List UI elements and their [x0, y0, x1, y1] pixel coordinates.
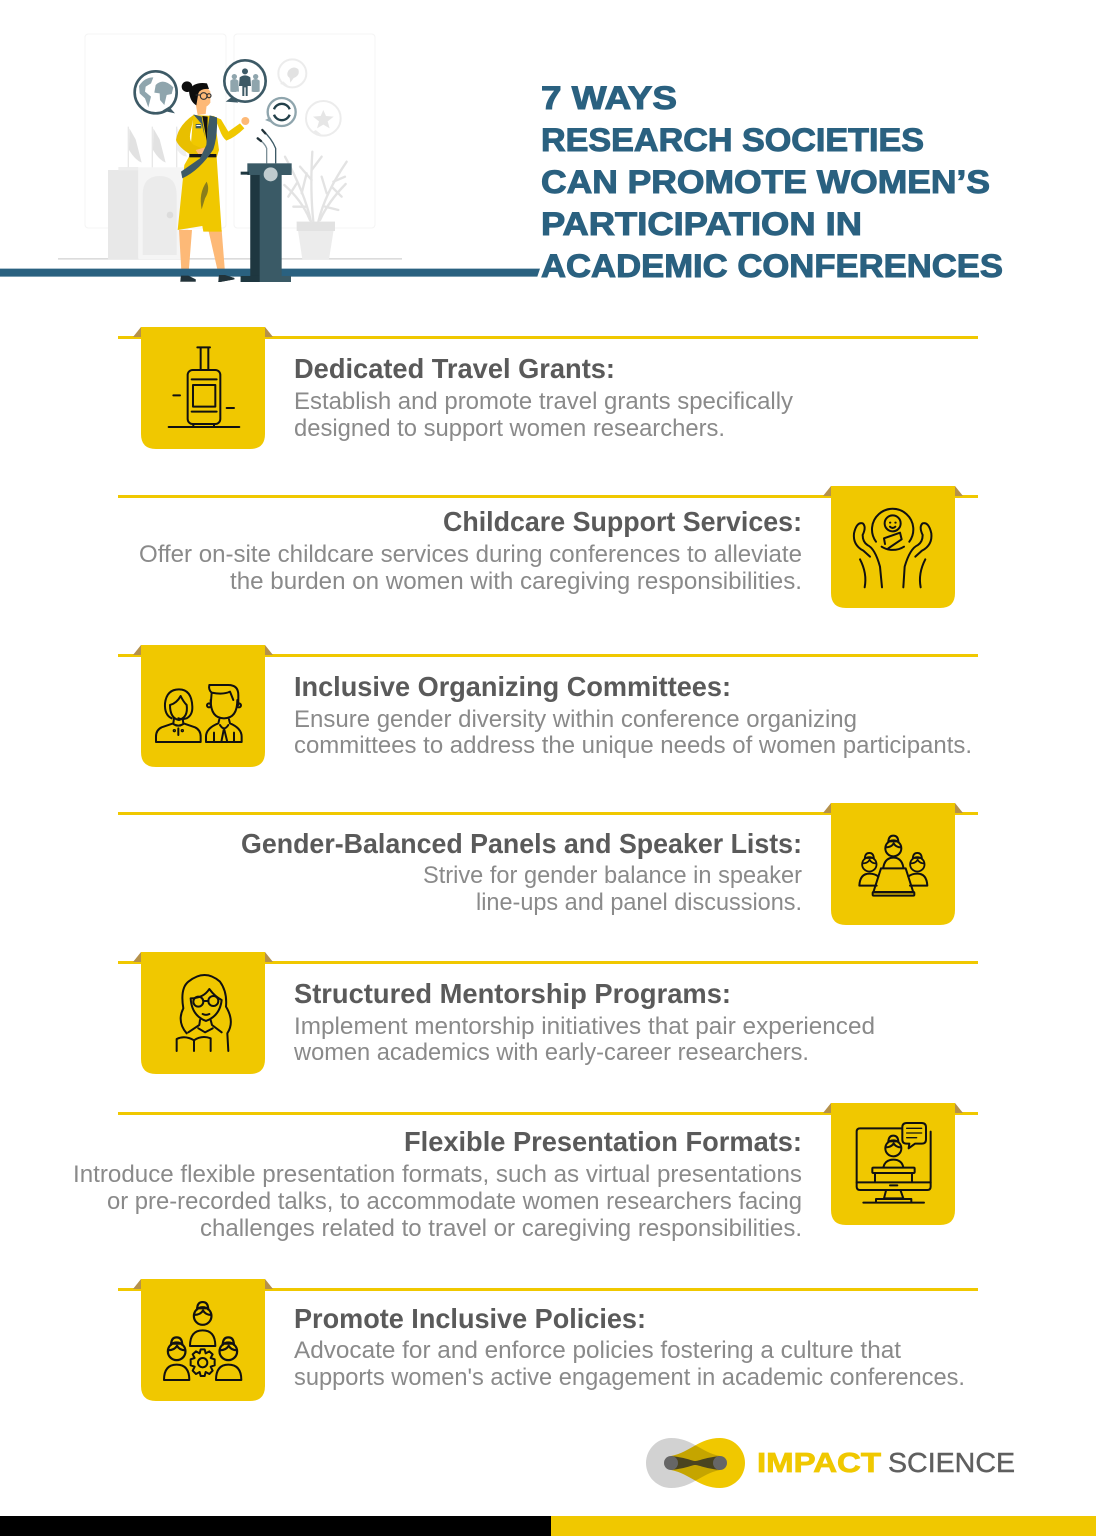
icon: three people with gear — [164, 1302, 241, 1380]
icon: woman with glasses reading book — [177, 975, 231, 1051]
logo: impact science — [646, 1438, 1015, 1488]
item 3: inclusive organizing committees: Inclusive Organizing Committees: — [294, 671, 731, 702]
item 5: structured mentorship programs — [118, 952, 978, 1074]
item 3: inclusive organizing committees: Ensure gender diversity within conference organizing — [294, 706, 857, 733]
icon: three people at table — [859, 836, 927, 896]
item 4: gender-balanced panels and speaker lists: line-ups and panel discussions. — [476, 889, 802, 916]
item 1: dedicated travel grants: Establish and promote travel grants specifically — [294, 388, 793, 415]
item 6: flexible presentation formats: Introduce flexible presentation formats, such as virtual presentations — [73, 1161, 802, 1188]
item 5: structured mentorship programs: Structured Mentorship Programs: — [294, 978, 731, 1009]
item 7: promote inclusive policies: Promote Inclusive Policies: — [294, 1303, 646, 1334]
footer bar — [0, 1516, 1096, 1536]
item 6: flexible presentation formats — [73, 1103, 978, 1242]
item 1: dedicated travel grants: Dedicated Travel Grants: — [294, 353, 615, 384]
item 2: childcare support services: the burden on women with caregiving responsibilities. — [230, 568, 802, 595]
item 3: inclusive organizing committees — [118, 645, 978, 767]
item 7: promote inclusive policies: Advocate for and enforce policies fostering a culture that — [294, 1337, 901, 1364]
icon: woman and man — [156, 685, 242, 742]
illustration: speaker at podium — [0, 34, 540, 282]
item 6: flexible presentation formats: challenges related to travel or caregiving responsibilities. — [200, 1215, 802, 1242]
icon: online presenter on monitor — [857, 1123, 931, 1203]
title: RESEARCH SOCIETIES — [541, 122, 924, 158]
item 1: dedicated travel grants: designed to support women researchers. — [294, 415, 725, 442]
title: CAN PROMOTE WOMEN’S — [541, 164, 990, 200]
icon: suitcase — [169, 347, 239, 427]
item 4: gender-balanced panels and speaker lists — [118, 803, 978, 925]
item 2: childcare support services: Offer on-site childcare services during conferences to alleviate — [139, 541, 802, 568]
item 5: structured mentorship programs: Implement mentorship initiatives that pair experienced — [294, 1013, 875, 1040]
title — [541, 80, 1003, 284]
logo: impact science: IMPACT — [757, 1447, 881, 1478]
title: 7 WAYS — [541, 80, 677, 116]
title: ACADEMIC CONFERENCES — [541, 248, 1003, 284]
item 4: gender-balanced panels and speaker lists: Strive for gender balance in speaker — [423, 862, 802, 889]
item 2: childcare support services: Childcare Support Services: — [443, 506, 802, 537]
item 5: structured mentorship programs: women academics with early-career researchers. — [293, 1039, 809, 1066]
title: PARTICIPATION IN — [541, 206, 862, 242]
item 7: promote inclusive policies: supports women's active engagement in academic conferences. — [294, 1364, 965, 1391]
item 3: inclusive organizing committees: committees to address the unique needs of women participants. — [294, 732, 972, 759]
item 4: gender-balanced panels and speaker lists: Gender-Balanced Panels and Speaker Lists: — [241, 828, 802, 859]
item 6: flexible presentation formats: or pre-recorded talks, to accommodate women researchers facing — [107, 1188, 802, 1215]
item 7: promote inclusive policies — [118, 1279, 978, 1401]
item 1: dedicated travel grants — [118, 327, 978, 449]
item 6: flexible presentation formats: Flexible Presentation Formats: — [404, 1126, 802, 1157]
icon: hands holding baby — [854, 509, 931, 587]
item 2: childcare support services — [118, 486, 978, 608]
logo: impact science: SCIENCE — [888, 1447, 1015, 1478]
